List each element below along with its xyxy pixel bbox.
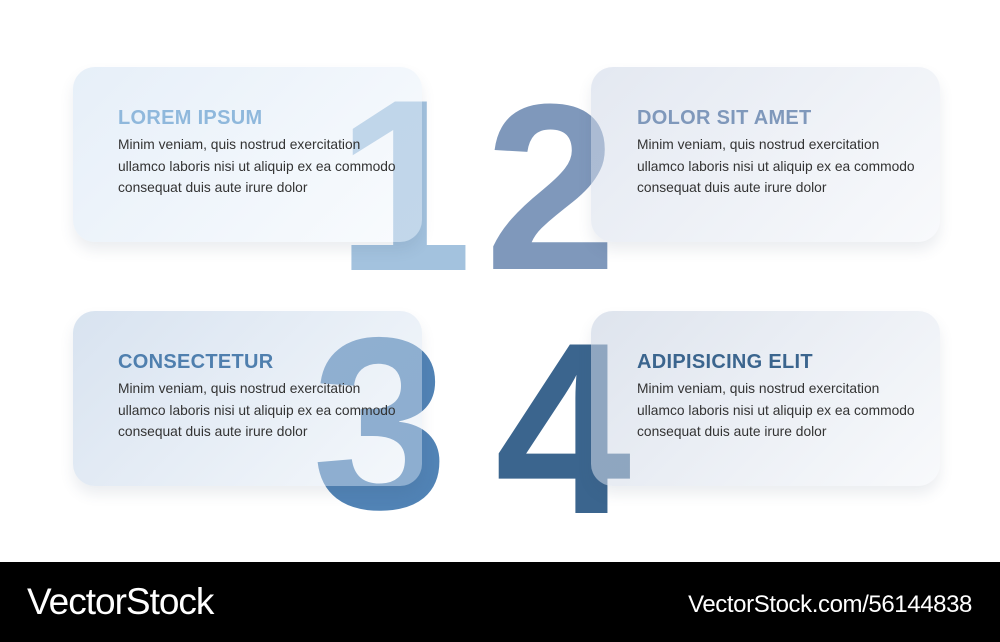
panel 2 box [591, 67, 940, 242]
panel 2 text: consequat duis aute irure dolor [637, 180, 826, 195]
panel 1 text: consequat duis aute irure dolor [118, 180, 307, 195]
panel 3 text: CONSECTETUR [118, 351, 274, 373]
panel 4 text: ullamco laboris nisi ut aliquip ex ea commodo [637, 402, 915, 418]
panel 3 text: ullamco laboris nisi ut aliquip ex ea commodo [118, 402, 396, 418]
footer bar [0, 562, 1000, 642]
footer url: VectorStock.com/56144838 [688, 591, 972, 618]
panel 4 text: consequat duis aute irure dolor [637, 424, 826, 439]
panel 1 text [118, 107, 396, 195]
panel 3 text: consequat duis aute irure dolor [118, 424, 307, 439]
number 4: 4 [495, 291, 631, 565]
number 1: 1 [336, 48, 472, 322]
panel 4 text: ADIPISICING ELIT [637, 351, 813, 373]
panel 2 text: ullamco laboris nisi ut aliquip ex ea commodo [637, 158, 915, 174]
panel 3 text [118, 351, 396, 439]
panel 2 text: Minim veniam, quis nostrud exercitation [637, 137, 879, 152]
panel 1 text: Minim veniam, quis nostrud exercitation [118, 137, 360, 152]
panel 3 text: Minim veniam, quis nostrud exercitation [118, 381, 360, 396]
panel 1 text: ullamco laboris nisi ut aliquip ex ea commodo [118, 158, 396, 174]
panel 1 box [73, 67, 422, 242]
number 2: 2 [485, 55, 617, 320]
footer logo: VectorStock [27, 581, 213, 622]
panel 1 text: LOREM IPSUM [118, 107, 262, 129]
panel 4 box [591, 311, 940, 486]
panel 2 text: DOLOR SIT AMET [637, 107, 812, 129]
panel 4 text: Minim veniam, quis nostrud exercitation [637, 381, 879, 396]
panel 2 text [637, 107, 915, 195]
number 3: 3 [312, 286, 448, 560]
panel 4 text [637, 351, 915, 439]
panel 3 box [73, 311, 422, 486]
